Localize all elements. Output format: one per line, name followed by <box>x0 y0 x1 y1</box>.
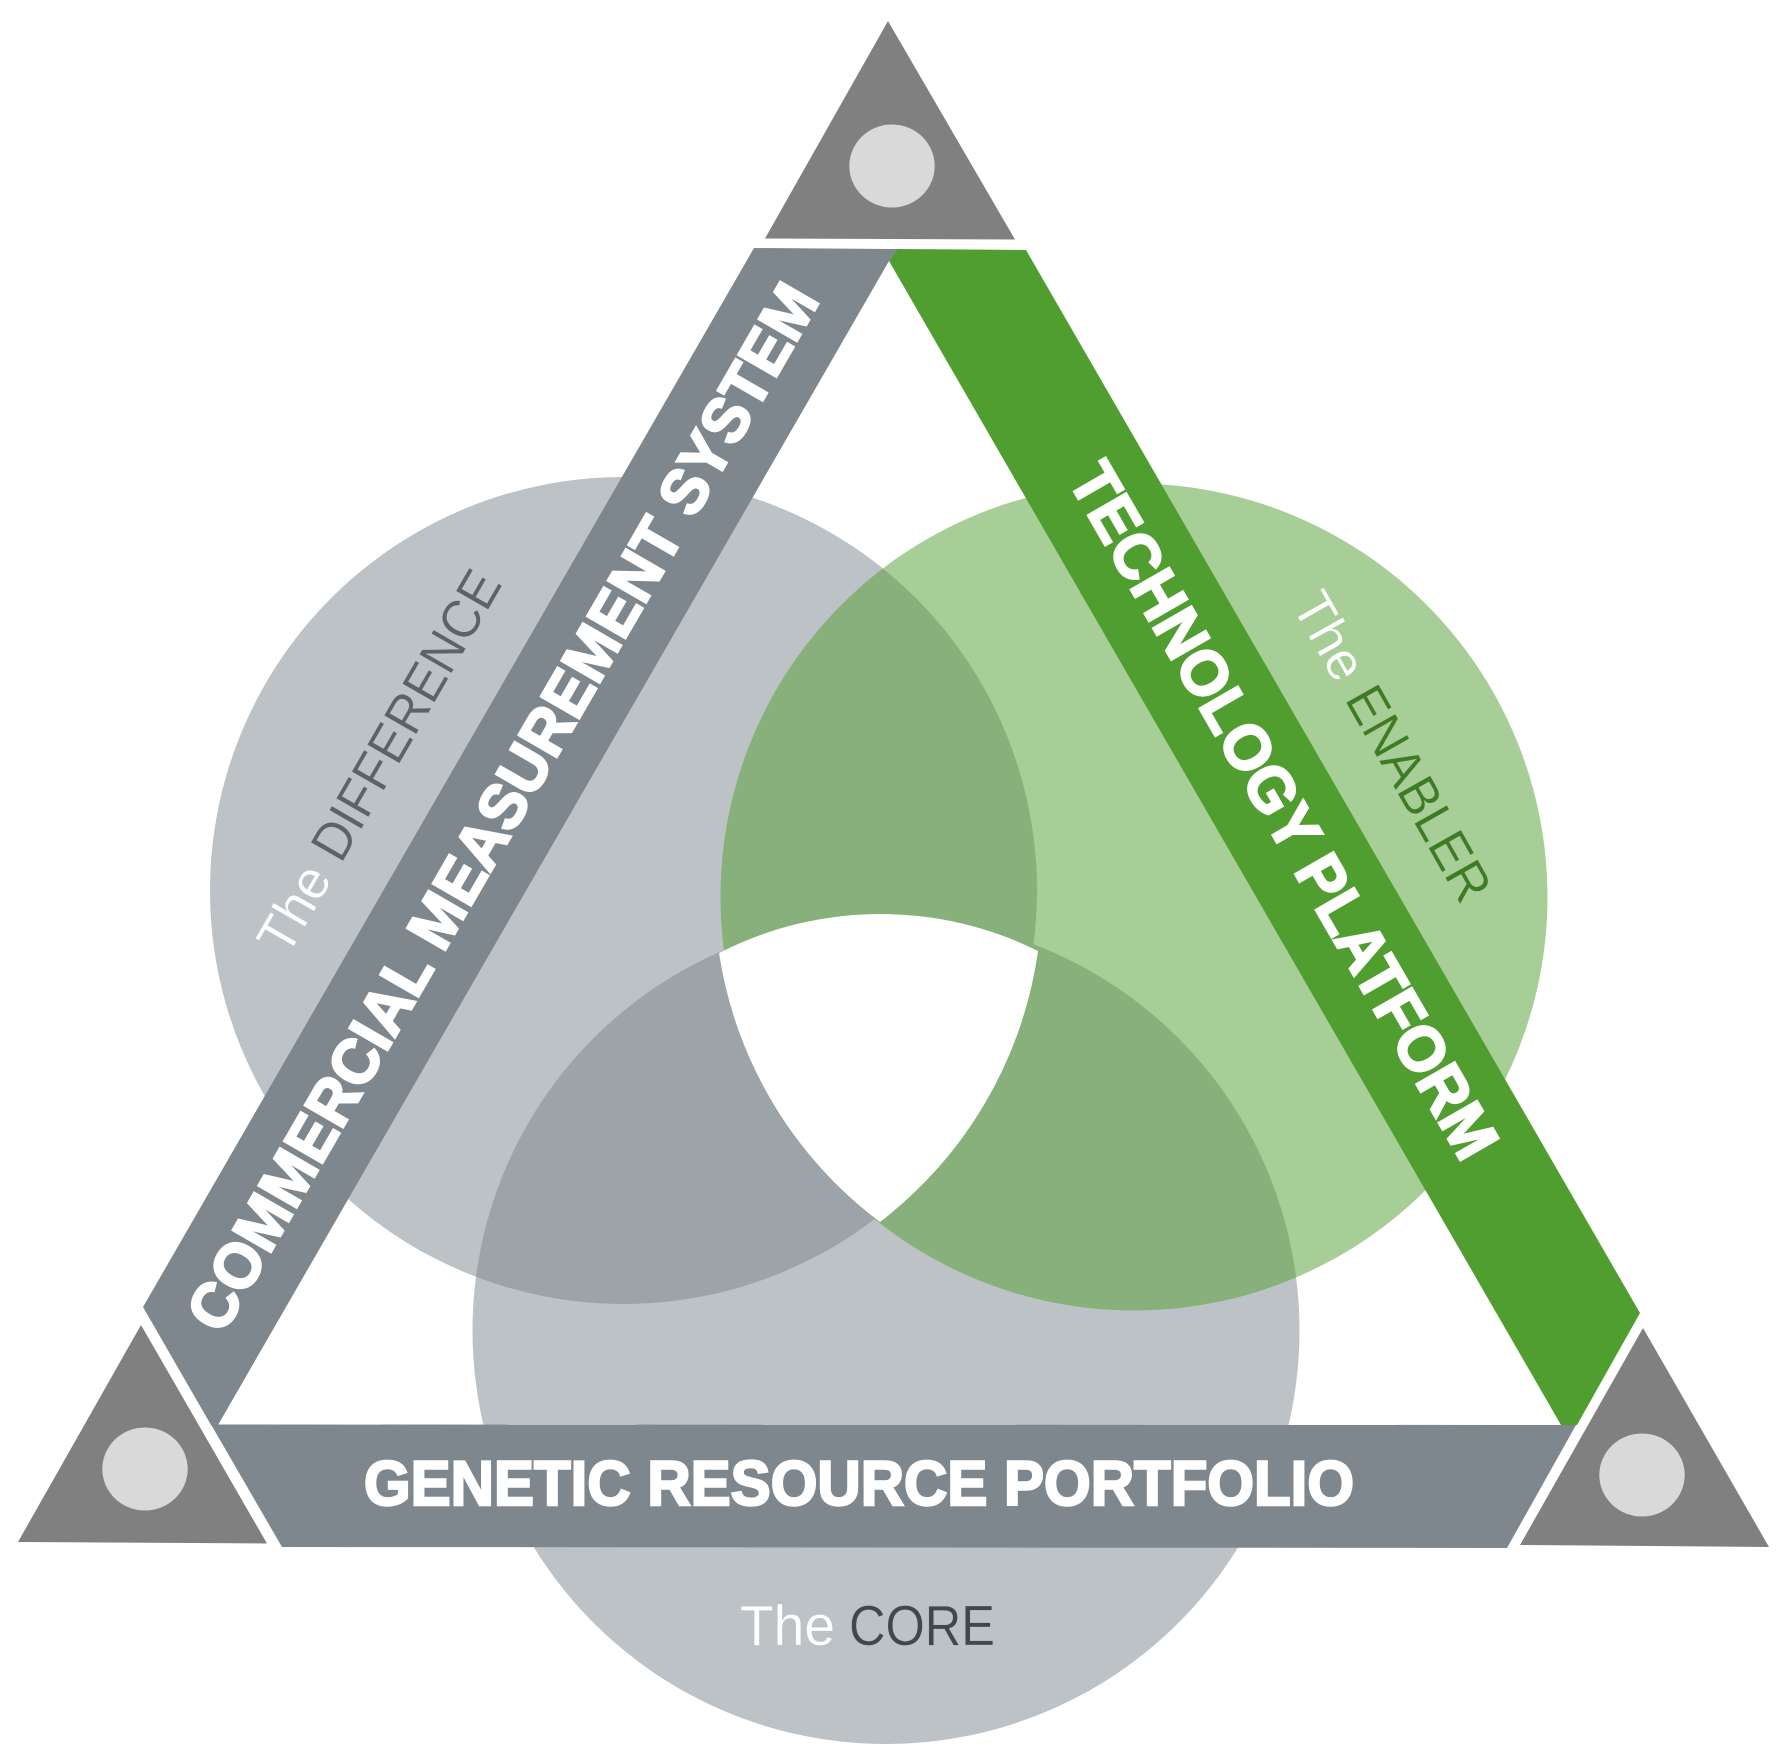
label: the difference <box>245 560 513 964</box>
label: the difference: The <box>245 854 343 964</box>
center: triple overlap <box>719 914 1038 1222</box>
bar: commercial measurement system <box>143 248 897 1425</box>
venn diagram circles <box>210 477 1548 1744</box>
label: the enabler <box>1281 581 1503 912</box>
right corner triangle icon <box>1520 1328 1769 1547</box>
top corner triangle icon <box>765 21 1015 240</box>
overlap: difference and core <box>476 950 874 1304</box>
bar: technology platform <box>889 249 1640 1425</box>
label: the core: The <box>740 1594 835 1658</box>
overlap: difference and enabler <box>720 568 1037 1219</box>
left corner triangle icon <box>18 1325 267 1544</box>
label: the core: CORE <box>849 1594 995 1658</box>
circle: the difference <box>210 477 1037 1304</box>
label: the enabler: ENABLER <box>1334 675 1503 912</box>
overlap: core and enabler <box>848 944 1296 1310</box>
circle: the core <box>472 917 1300 1744</box>
heading: genetic resource portfolio: GENETIC RESOURCE PORTFOLIO <box>364 1449 1354 1519</box>
label: the difference: DIFFERENCE <box>299 560 513 870</box>
circle: the enabler <box>720 484 1548 1310</box>
label: the enabler: The <box>1281 581 1378 691</box>
bar: genetic resource portfolio <box>211 1424 1576 1548</box>
label: the core <box>740 1594 995 1658</box>
heading: commercial measurement system: COMMERCIAL MEASUREMENT SYSTEM <box>172 271 833 1343</box>
heading: technology platform: TECHNOLOGY PLATFORM <box>1055 450 1513 1171</box>
